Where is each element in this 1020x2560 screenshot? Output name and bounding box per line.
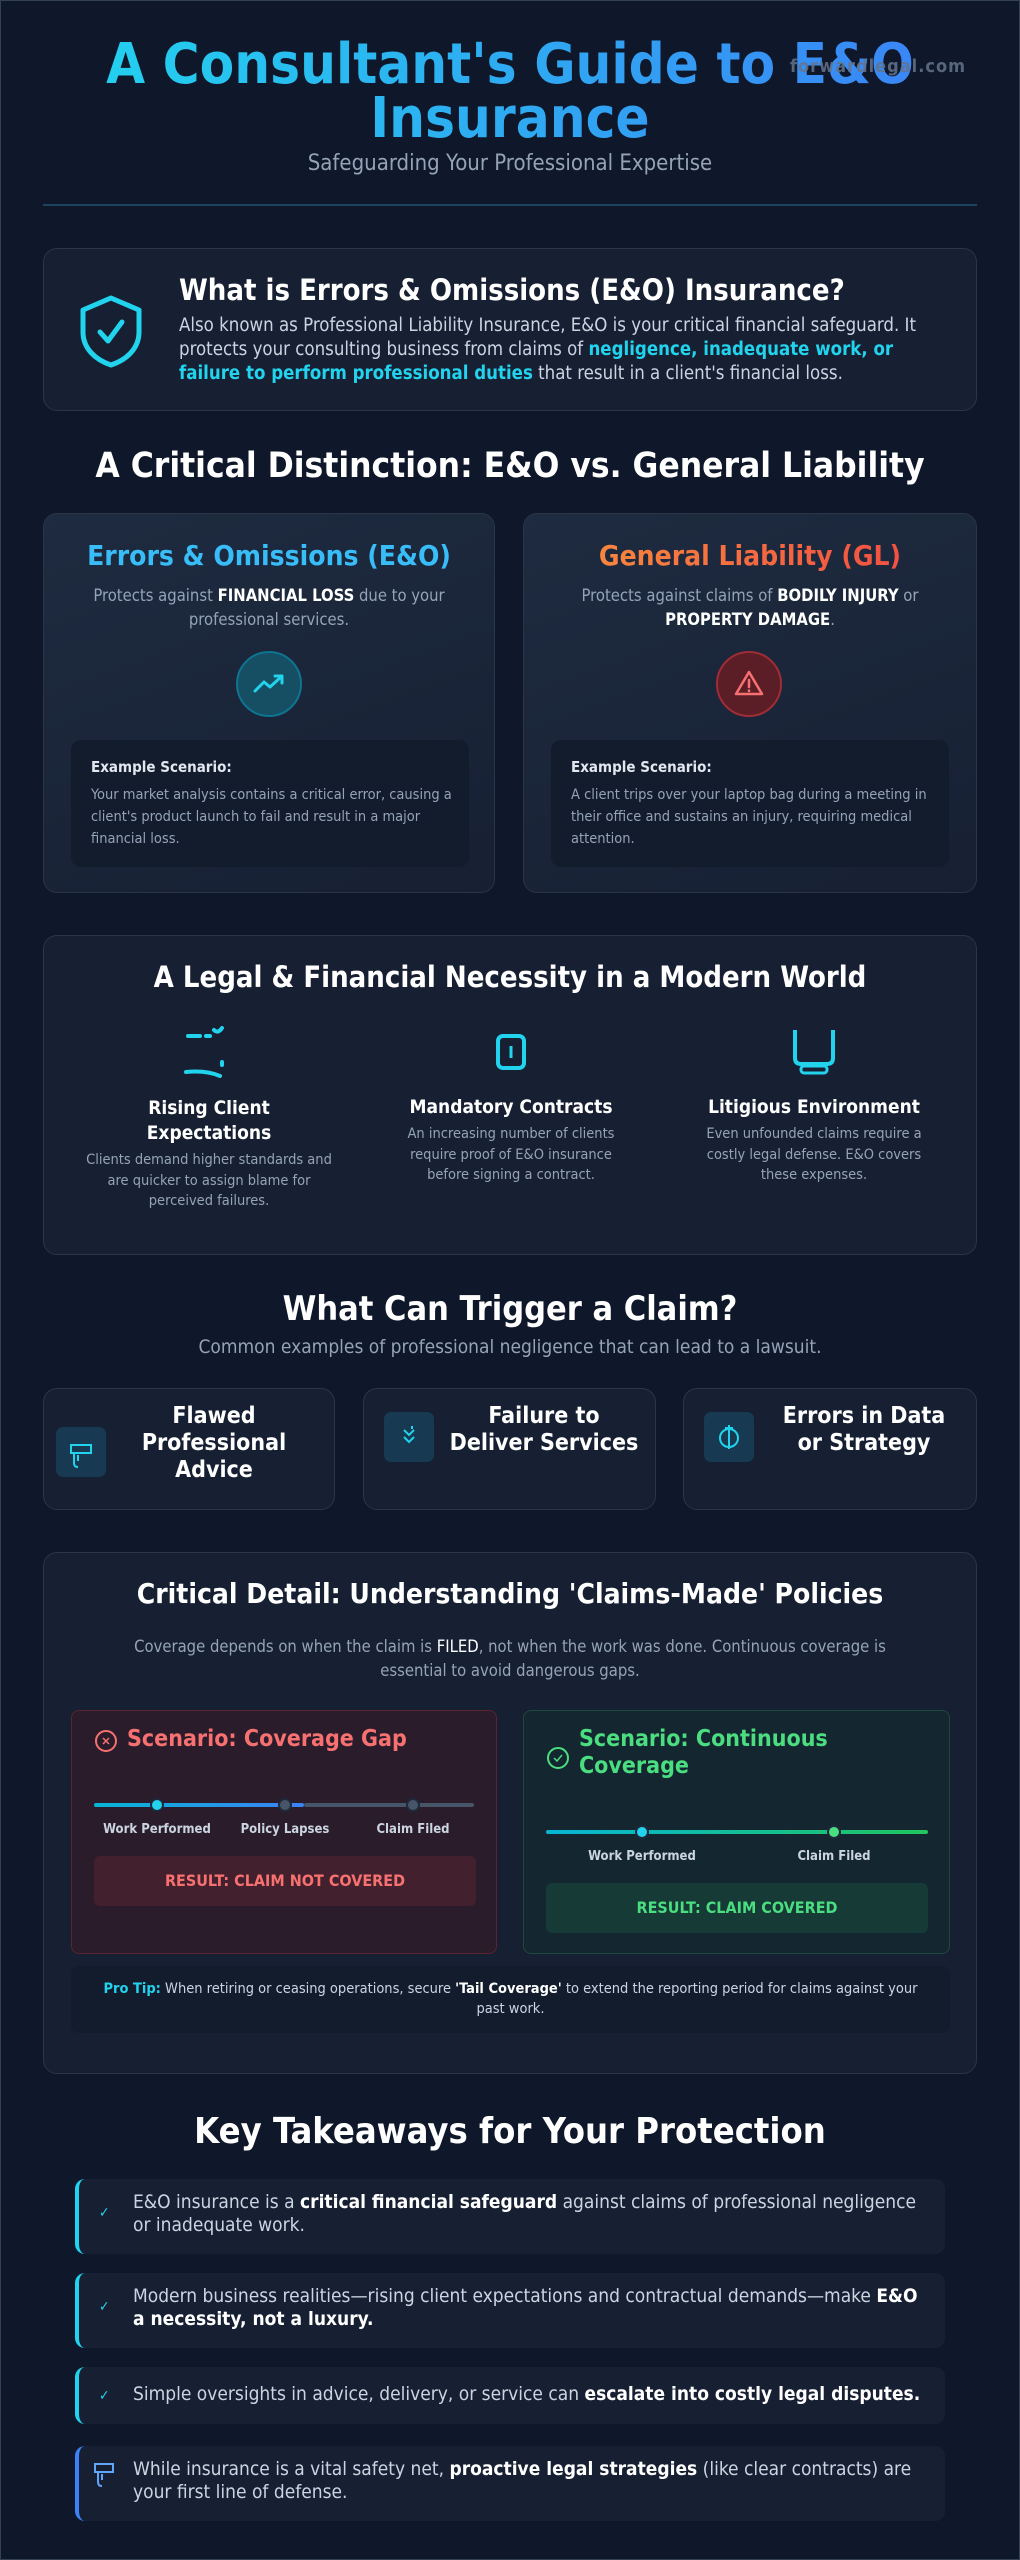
scenario: continuous: Work Performed [588, 1849, 696, 1864]
panel: E&O: Errors & Omissions (E&O) [87, 539, 451, 572]
panel: necessity [43, 935, 977, 1255]
column: rising: Clients demand higher standards and are quicker to assign blame for perceived failures. [86, 1152, 332, 1209]
scenario: continuous: RESULT: CLAIM COVERED [636, 1898, 838, 1917]
takeaway 2 [75, 2273, 945, 2348]
takeaway 1 [75, 2179, 945, 2254]
column: litigious: Even unfounded claims require a costly legal defense. E&O covers these expenses. [706, 1126, 922, 1183]
icon: trend [236, 651, 302, 717]
scenario: continuous: Coverage [579, 1753, 689, 1779]
example box [71, 740, 469, 867]
example box [551, 740, 949, 867]
card: failure to deliver [363, 1388, 656, 1510]
pro tip: Pro Tip: When retiring or ceasing operations, secure 'Tail Coverage' to extend the reporting period for claims against your past work. [103, 1981, 918, 2017]
panel: GL: General Liability (GL) [599, 539, 901, 572]
card: errors in data [683, 1388, 977, 1510]
takeaway 1: ✓ [99, 2205, 110, 2221]
column: contracts: Mandatory Contracts [409, 1096, 612, 1118]
subtitle: trigger: Common examples of professional negligence that can lead to a lawsuit. [198, 1336, 822, 1358]
card: failure to deliver: Failure to [488, 1403, 600, 1429]
panel: GL [523, 513, 977, 893]
panel: E&O: Protects against FINANCIAL LOSS due to your professional services. [93, 586, 445, 629]
example box: Example Scenario: [91, 758, 232, 776]
heading: takeaways: Key Takeaways for Your Protection [194, 2111, 826, 2152]
card: flawed advice [43, 1388, 335, 1510]
takeaway 4: While insurance is a vital safety net, proactive legal strategies (like clear contracts) are your first line of defense. [133, 2458, 911, 2503]
icon [184, 1026, 224, 1078]
takeaway 3 [75, 2367, 945, 2424]
scenario: coverage gap [71, 1710, 497, 1954]
card: flawed advice: Professional [142, 1430, 286, 1456]
takeaway 2: Modern business realities—rising client expectations and contractual demands—make E&O a necessity, not a luxury. [133, 2285, 917, 2330]
scenario: coverage gap: RESULT: CLAIM NOT COVERED [165, 1871, 405, 1890]
takeaway 4 [75, 2446, 945, 2521]
panel: claims-made: Coverage depends on when the claim is FILED, not when the work was done. Continuous coverage is essential to avoid dangerous gaps. [134, 1637, 886, 1680]
subtitle: Safeguarding Your Professional Expertise [308, 151, 712, 176]
panel: necessity: A Legal & Financial Necessity in a Modern World [154, 960, 866, 994]
takeaway 3: Simple oversights in advice, delivery, or service can escalate into costly legal disputes. [133, 2383, 920, 2405]
scenario: continuous: Scenario: Continuous [579, 1726, 828, 1752]
column: litigious: Litigious Environment [708, 1096, 920, 1118]
heading: trigger: What Can Trigger a Claim? [283, 1289, 737, 1329]
column: litigious [706, 1030, 922, 1183]
takeaway 2: ✓ [99, 2299, 110, 2315]
title [60, 38, 960, 146]
scenario: coverage gap: Policy Lapses [241, 1822, 329, 1837]
panel: claims-made [43, 1552, 977, 2074]
title: Insurance [370, 86, 650, 151]
icon: warning [716, 651, 782, 717]
card: flawed advice: Advice [175, 1457, 253, 1483]
scenario: coverage gap: Work Performed [103, 1822, 211, 1837]
panel: claims-made: Critical Detail: Understanding 'Claims-Made' Policies [137, 1577, 883, 1610]
example box: Example Scenario: [571, 758, 712, 776]
card: failure to deliver: Deliver Services [450, 1430, 638, 1456]
watermark: forwardlegal.com [790, 56, 966, 77]
example box: A client trips over your laptop bag during a meeting in their office and sustains an injury, requiring medical attention. [571, 787, 927, 847]
timeline [94, 1803, 304, 1807]
panel: E&O [43, 513, 495, 893]
scenario: continuous: Claim Filed [797, 1849, 871, 1864]
panel: GL: Protects against claims of BODILY INJURY or PROPERTY DAMAGE. [582, 586, 918, 629]
scenario: continuous [523, 1710, 950, 1954]
column: rising [86, 1026, 332, 1209]
scenario: coverage gap: Scenario: Coverage Gap [127, 1726, 407, 1752]
takeaway 3: ✓ [99, 2388, 110, 2404]
title: A Consultant's Guide to E&O [106, 32, 914, 97]
card: errors in data: Errors in Data [783, 1403, 945, 1429]
heading: distinction: A Critical Distinction: E&O vs. General Liability [95, 446, 925, 486]
icon: shield [80, 296, 142, 368]
scenario: coverage gap: Claim Filed [376, 1822, 450, 1837]
column: contracts: An increasing number of clients require proof of E&O insurance before signing a contract. [408, 1126, 614, 1183]
example box: Your market analysis contains a critical error, causing a client's product launch to fail and result in a major financial loss. [91, 787, 452, 847]
card: flawed advice: Flawed [172, 1403, 256, 1429]
panel: what is E&O [43, 248, 977, 411]
column: rising: Expectations [147, 1122, 271, 1144]
takeaway 1: E&O insurance is a critical financial safeguard against claims of professional negligence or inadequate work. [133, 2191, 916, 2236]
column: contracts [408, 1034, 614, 1183]
text: Also known as Professional Liability Insurance, E&O is your critical financial safeguard. It protects your consulting business from claims of negligence, inadequate work, or failure to perform professional duties that result in a client's financial loss. [179, 315, 916, 384]
pro tip [71, 1966, 950, 2033]
column: rising: Rising Client [148, 1097, 270, 1119]
heading: What is Errors & Omissions (E&O) Insurance? [179, 273, 845, 307]
card: errors in data: or Strategy [798, 1430, 930, 1456]
